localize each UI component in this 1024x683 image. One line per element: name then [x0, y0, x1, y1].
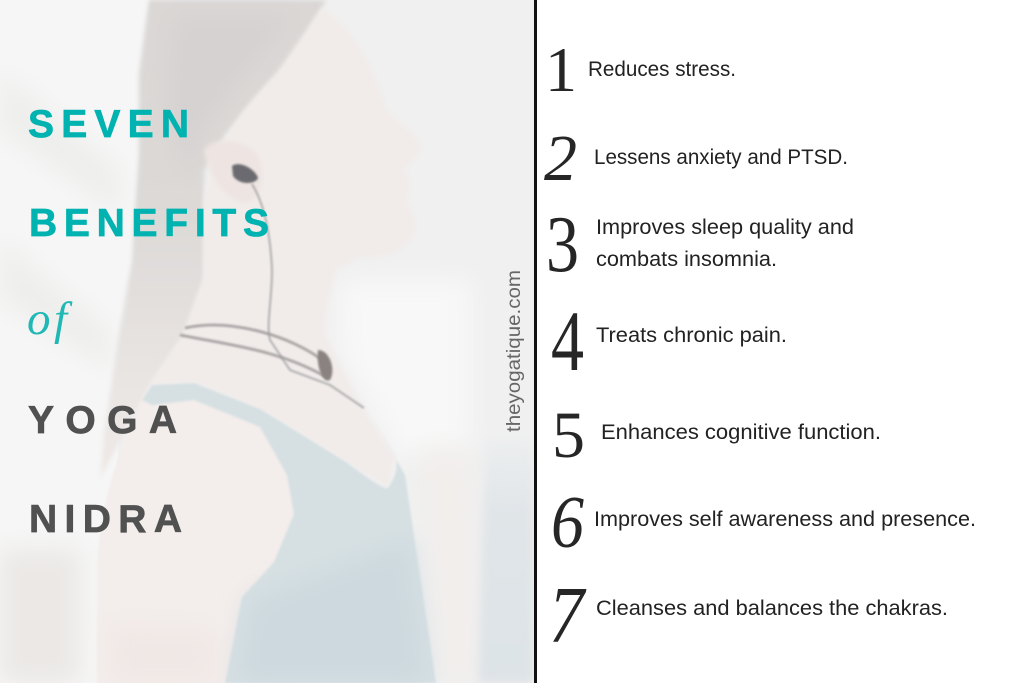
shoulder [98, 466, 117, 682]
earphone cable [252, 184, 364, 408]
heading: BENEFITS: BENEFITS [29, 202, 269, 245]
panel: faded photo of woman with earphones [0, 0, 534, 683]
necklace cord [180, 325, 328, 378]
benefit 7: Cleanses and balances the chakras. [596, 597, 948, 620]
benefit 1: Reduces stress. [588, 58, 736, 81]
heading: YOGA: YOGA [28, 399, 177, 442]
earphone [232, 164, 258, 183]
website credit: theyogatique.com [504, 270, 525, 432]
heading: SEVEN: SEVEN [28, 103, 189, 146]
benefit 6: Improves self awareness and presence. [594, 508, 976, 531]
benefit 4 [551, 293, 787, 389]
benefit 6: 6 [551, 482, 584, 564]
benefit 6 [551, 482, 976, 564]
face and neck [242, 26, 310, 114]
benefit 4: 4 [551, 293, 584, 389]
hair [100, 0, 326, 479]
benefit 3: Improves sleep quality and [596, 216, 854, 239]
benefit 2: Lessens anxiety and PTSD. [594, 146, 848, 169]
benefit 5: Enhances cognitive function. [601, 421, 881, 444]
benefit 5: 5 [552, 399, 585, 472]
ear [204, 141, 228, 172]
divider line [534, 0, 537, 683]
heading: of: of [27, 293, 73, 345]
benefit 1 [545, 34, 736, 105]
benefit 7: 7 [549, 572, 587, 660]
benefit 3: 3 [546, 201, 579, 289]
benefit 5 [552, 399, 881, 472]
heading: NIDRA: NIDRA [29, 498, 182, 541]
benefit 3 [546, 201, 854, 289]
benefit 7 [549, 572, 948, 660]
tank top [142, 383, 436, 683]
benefit 2 [544, 122, 848, 195]
benefit 2: 2 [544, 122, 577, 195]
benefit 3: combats insomnia. [596, 248, 777, 271]
benefit 1: 1 [545, 34, 577, 105]
benefit 4: Treats chronic pain. [596, 324, 787, 347]
